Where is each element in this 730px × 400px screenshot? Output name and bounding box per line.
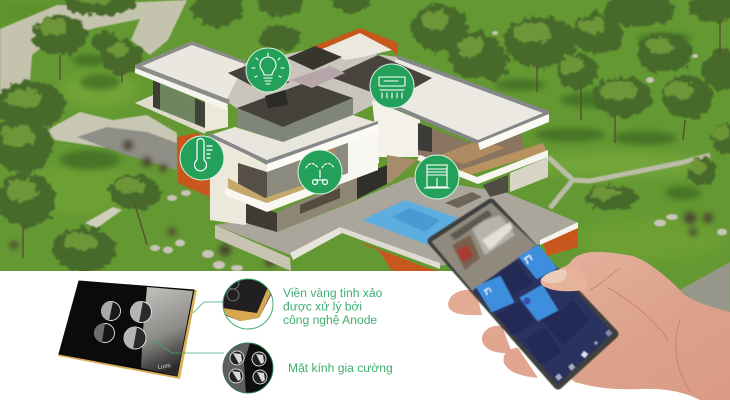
room shading <box>450 210 515 270</box>
hand holding phone <box>448 252 730 400</box>
tile glyphs <box>484 255 532 295</box>
thumb <box>541 268 587 291</box>
terrace and plinth <box>215 177 578 271</box>
orange walls <box>177 28 578 271</box>
icon: air conditioner <box>370 64 414 108</box>
detail circle: glass buttons <box>222 343 273 395</box>
blue tile one <box>477 277 513 311</box>
switch silver reflection <box>141 287 193 376</box>
circle ring <box>223 343 273 393</box>
finger three <box>504 348 538 378</box>
text: gold frame description: Viền vàng tinh xảo <box>283 286 382 300</box>
app home image <box>433 204 535 290</box>
button highlights <box>232 353 265 382</box>
front roof <box>210 115 378 172</box>
frame corner <box>224 288 270 321</box>
icon: thermometer <box>180 136 224 180</box>
switch black glass <box>59 281 194 376</box>
buttons <box>229 351 267 384</box>
glass reflection <box>224 344 250 392</box>
finger two <box>482 326 512 353</box>
hand creases <box>590 268 690 392</box>
text: reinforced glass: Mặt kính gia cường <box>288 361 393 375</box>
glass connector <box>290 66 345 88</box>
lawn shading <box>47 78 710 251</box>
centre block walls <box>210 123 417 232</box>
tree trunks <box>23 20 720 258</box>
thumbnail <box>541 269 567 283</box>
text: gold frame description: công nghệ Anode <box>283 313 377 327</box>
text: gold frame description: được xử lý bởi <box>283 300 362 314</box>
app nav icons <box>555 330 612 381</box>
switch logo: Lumi <box>157 363 171 371</box>
app dark panel <box>473 246 613 384</box>
upper pavilion with glass <box>237 98 353 142</box>
rocks and shrubs <box>10 31 727 271</box>
swimming pool <box>362 200 458 245</box>
blue tile three <box>521 286 557 320</box>
palm and wrist <box>505 252 730 400</box>
back roof <box>320 33 392 60</box>
callout line: glass <box>153 340 224 353</box>
switch gold frame <box>58 282 197 379</box>
garden paths <box>0 0 730 320</box>
white below frame <box>226 295 272 328</box>
icon: window shutter <box>415 155 459 199</box>
circle ring <box>223 279 273 329</box>
smartphone <box>432 203 614 385</box>
phone body <box>432 203 614 385</box>
finger one <box>448 290 482 315</box>
tile backgrounds <box>496 261 590 365</box>
outdoor sofa <box>445 192 482 208</box>
dark roof slabs <box>228 46 432 127</box>
right wing of house <box>372 55 549 197</box>
icon: light bulb <box>246 48 290 92</box>
left wing of house <box>135 41 245 134</box>
switch touch buttons <box>94 301 152 349</box>
icon: sprinkler <box>298 150 342 194</box>
detail circle: gold frame <box>222 277 273 330</box>
trees <box>0 0 730 272</box>
purple dot glyph <box>524 298 530 304</box>
middle house mass <box>225 47 398 142</box>
panel: smart switch product <box>58 281 197 379</box>
callout line: gold frame <box>193 302 224 313</box>
tree shadows <box>60 33 701 200</box>
button outlines <box>227 277 239 301</box>
blue tile two <box>520 246 556 278</box>
